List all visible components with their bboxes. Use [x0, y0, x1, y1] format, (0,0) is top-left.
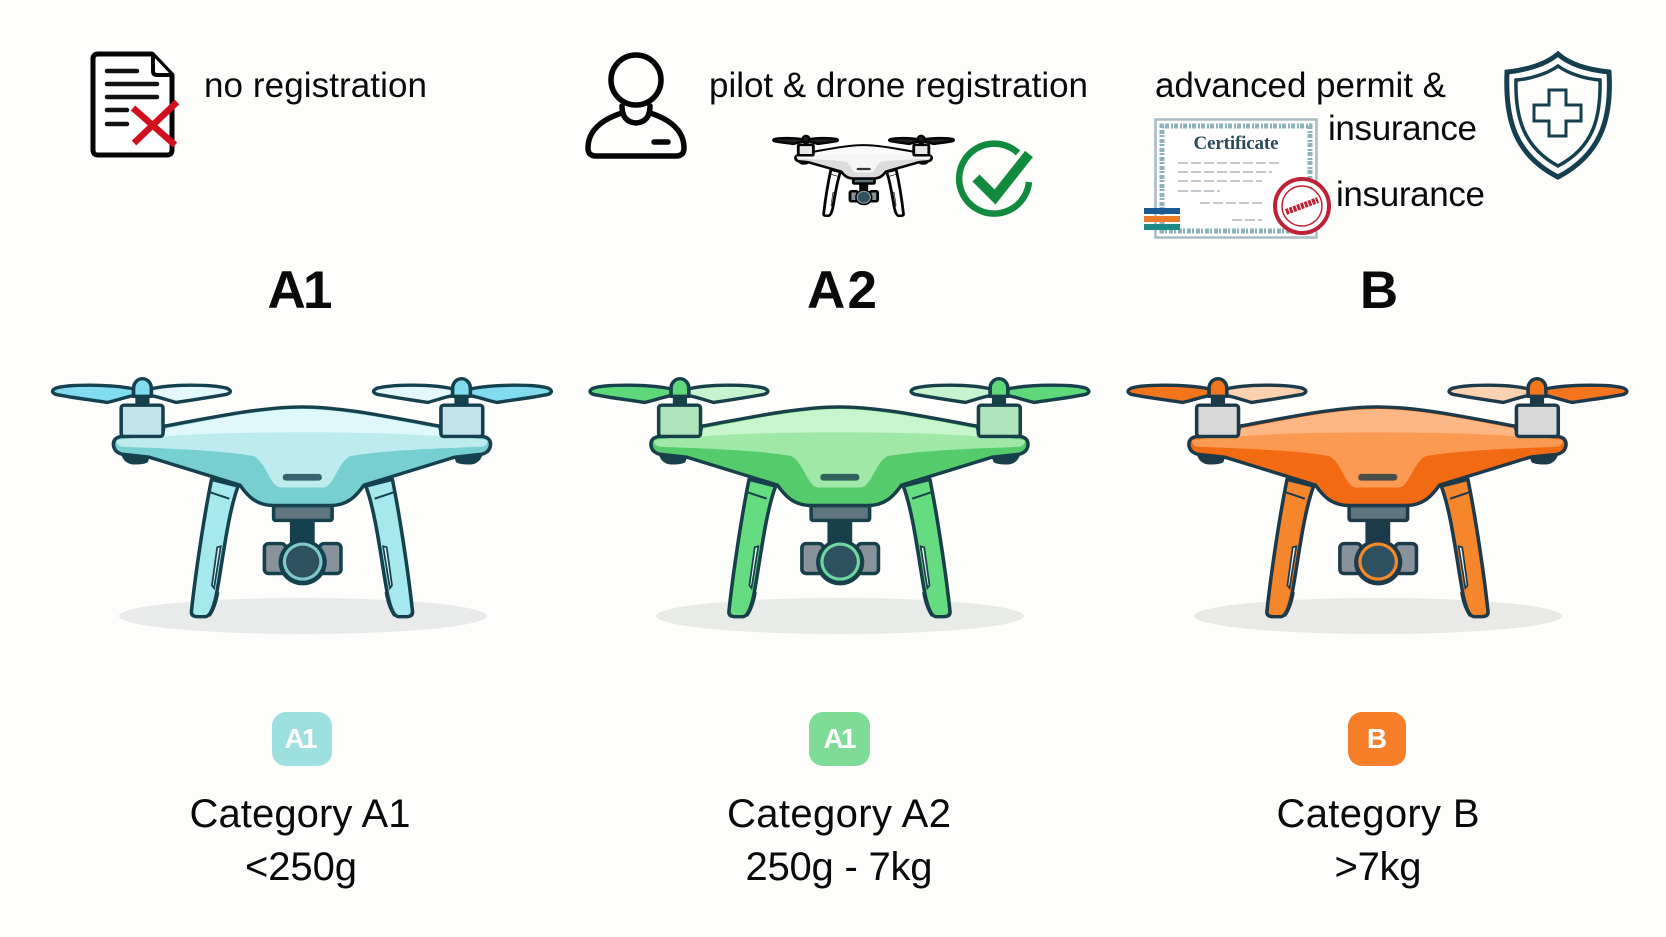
icon: small drone: [774, 136, 954, 216]
drone B: [1128, 379, 1627, 634]
text: advanced permit and: advanced permit &: [1155, 66, 1446, 105]
badge: B: B: [1367, 723, 1387, 754]
text: pilot and drone registration: pilot & drone registration: [709, 66, 1088, 105]
label: 250g to 7kg: 250g - 7kg: [746, 845, 932, 889]
drone A2: [590, 379, 1089, 634]
badge: A1: A1: [284, 723, 318, 754]
label: Category A2: Category A2: [727, 792, 951, 836]
text: insurance lower: insurance: [1336, 175, 1485, 214]
label: Category B: Category B: [1276, 792, 1480, 836]
text: insurance upper: insurance: [1328, 109, 1477, 148]
label: over 7kg: >7kg: [1334, 845, 1422, 889]
badge: A2: A1: [824, 723, 856, 754]
text: no registration: no registration: [204, 66, 427, 105]
icon: pilot: [588, 55, 684, 156]
icon: certificate: Certificate: [1194, 133, 1278, 154]
heading: A2: A2: [807, 261, 877, 320]
label: Category A1: Category A1: [190, 792, 410, 836]
panel: category A1 requirements: [93, 54, 427, 155]
panel: category B requirements: [1144, 54, 1609, 238]
panel: category A2 requirements: [588, 55, 1088, 216]
icon: document with red cross: [93, 54, 177, 155]
icon: green check in circle: [959, 144, 1029, 214]
icon: shield with cross: [1507, 54, 1609, 177]
heading: B: B: [1360, 261, 1398, 320]
badge: A2: [809, 712, 870, 766]
label: under 250g: <250g: [245, 845, 357, 889]
badge: A1: [272, 712, 332, 766]
badge: B: [1348, 712, 1406, 766]
icon: certificate: [1144, 120, 1329, 238]
heading: A1: A1: [268, 261, 332, 320]
drone A1: [53, 379, 551, 634]
